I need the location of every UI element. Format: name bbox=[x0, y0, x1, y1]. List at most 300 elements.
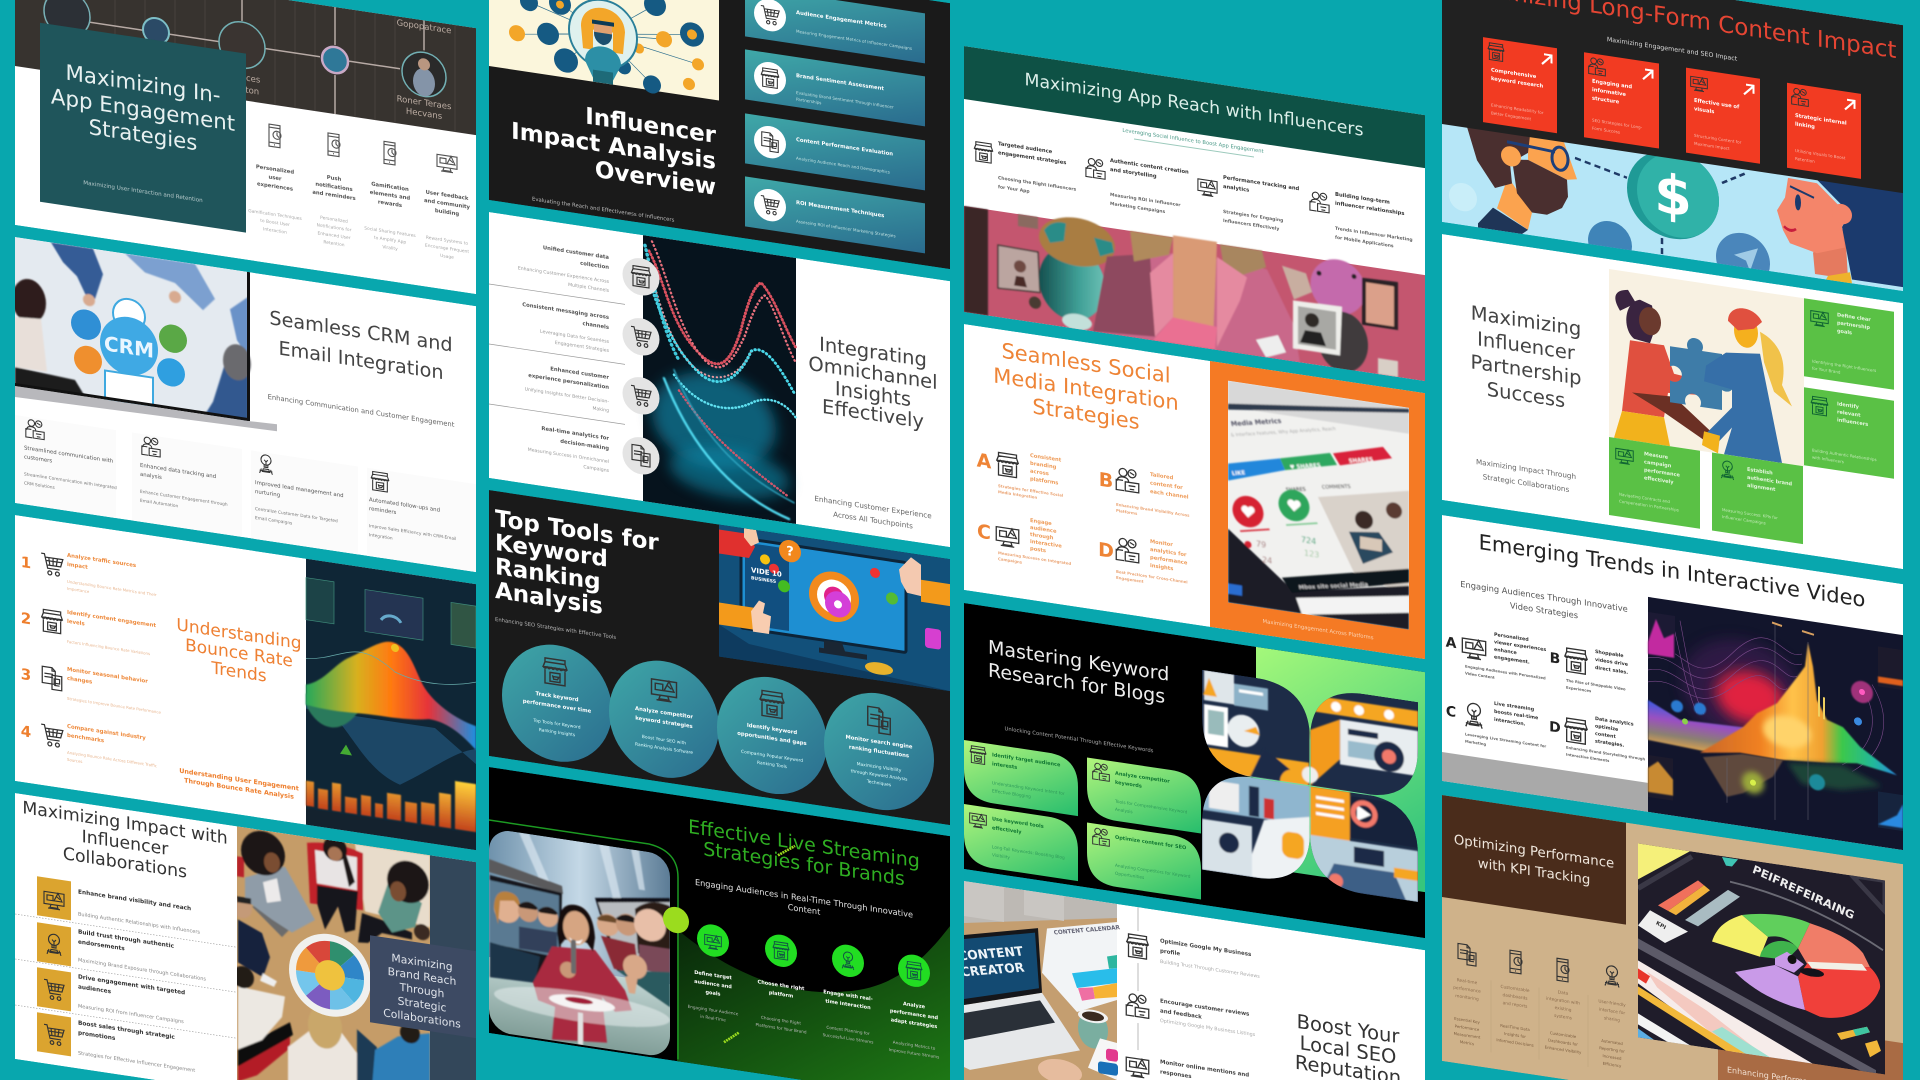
step 4: Analyzing Metrics to bbox=[893, 1039, 936, 1050]
feature: push notifications: and reminders bbox=[312, 190, 356, 202]
photo: dark network of people: Hecvans bbox=[406, 107, 443, 122]
leaf card 3: effectively bbox=[992, 825, 1022, 836]
leaf card 1: Effective Blogging bbox=[992, 788, 1031, 800]
column: real-time monitoring: Essential Key bbox=[1454, 1015, 1481, 1024]
subtitle: Engaging Audiences Through Innovative bbox=[1460, 579, 1628, 614]
item B bbox=[1550, 642, 1629, 699]
item: enhanced personalization bbox=[525, 360, 660, 421]
photo: social media metrics dashboard: & Interface Features, Why App Analytics, Reach bbox=[1230, 426, 1336, 439]
item A: Personalized bbox=[1494, 631, 1529, 643]
column: dashboards: and reports bbox=[1503, 1000, 1528, 1009]
item C: Live streaming bbox=[1494, 700, 1535, 712]
item A: Strategies for Effective Social bbox=[998, 483, 1064, 497]
item: enhanced personalization: Making bbox=[592, 405, 609, 413]
card: engaging structure: SEO Strategies for Long- bbox=[1592, 117, 1643, 130]
card: measure performance: performance bbox=[1644, 467, 1681, 479]
item: unified customer data: collection bbox=[580, 261, 609, 271]
card: measure performance: Compensation in Partnerships bbox=[1619, 498, 1679, 512]
item C: interactive bbox=[1030, 539, 1062, 550]
item: monitor mentions bbox=[1126, 1054, 1249, 1080]
feature: push notifications: Enhanced User bbox=[317, 230, 351, 241]
card: measure performance: campaign bbox=[1644, 459, 1672, 469]
item A bbox=[1446, 624, 1546, 688]
circle: identify keyword bbox=[717, 669, 827, 802]
column: user-friendly interface: Increased bbox=[1603, 1053, 1622, 1060]
title: Strategies bbox=[1032, 393, 1140, 434]
leaf card 4: Opportunities bbox=[1115, 870, 1145, 881]
card: establish alignment: alignment bbox=[1747, 483, 1776, 493]
item A: viewer experiences bbox=[1494, 639, 1546, 653]
title: Media Integration bbox=[993, 362, 1179, 415]
image: performance gauge dashboard: PEIFREFEIRAING bbox=[1751, 862, 1856, 922]
card: define clear goals: Identifying the Right Influencers bbox=[1812, 358, 1876, 373]
card: data tracking: Enhance Customer Engagement through bbox=[140, 488, 228, 507]
item D: analytics for bbox=[1150, 547, 1187, 558]
feature: personalized user experiences bbox=[248, 121, 302, 238]
leaf card 3: Visibility bbox=[992, 852, 1010, 860]
leaf card 4: Analyzing Competitors for Keyword bbox=[1115, 862, 1191, 880]
column: dashboards: dashboards bbox=[1503, 992, 1528, 1001]
card: engaging structure: structure bbox=[1592, 96, 1620, 106]
circle: track keyword: Ranking Insights bbox=[539, 727, 576, 738]
item: encourage reviews: Optimizing Google My Business Listings bbox=[1160, 1018, 1256, 1038]
card: establish alignment: Establish bbox=[1747, 467, 1773, 477]
column: real-time monitoring: Measurement bbox=[1454, 1030, 1481, 1039]
slide: Seamless CRM and Email Integration bbox=[12, 237, 476, 572]
card: content performance: Analyzing Audience Reach and Demographics bbox=[796, 156, 890, 175]
item A bbox=[977, 445, 1064, 503]
column: real-time monitoring: performance bbox=[1453, 984, 1481, 994]
title: Maximizing bbox=[1471, 301, 1581, 340]
item C: Measuring Success on Integrated bbox=[998, 550, 1071, 566]
list item 2: 2 bbox=[21, 609, 31, 628]
feature: user feedback: Usage bbox=[440, 252, 454, 260]
card: audience engagement: Measuring Engagement Metrics of Influencer Campaigns bbox=[796, 29, 912, 51]
title: Influencer bbox=[1477, 327, 1576, 365]
leaf card 2: Tools for Comprehensive Keyword bbox=[1114, 798, 1188, 815]
card: ROI measurement: ROI Measurement Techniques bbox=[796, 200, 884, 219]
header block and title: with KPI Tracking bbox=[1478, 856, 1590, 888]
list item 1: 1 bbox=[21, 553, 31, 572]
column: dashboards: Informed Decisions bbox=[1496, 1037, 1534, 1047]
card: internal linking: Retention bbox=[1795, 155, 1815, 163]
photo: dark network of people: Gopopatrace bbox=[397, 18, 451, 36]
card: brand sentiment: Evaluating Brand Sentiment Through Influencer bbox=[796, 90, 894, 109]
list item 1: Importance bbox=[67, 585, 90, 594]
feature: personalized user experiences: Personalized bbox=[256, 164, 294, 176]
item 4 bbox=[37, 1012, 195, 1075]
leaf card 1: interests bbox=[992, 761, 1017, 771]
column: dashboards bbox=[1496, 948, 1534, 1047]
feature: personalized user experiences: Interaction bbox=[263, 226, 287, 235]
slide: Optimizing Performance with KPI Tracking bbox=[1442, 795, 1908, 1080]
image: monitor with target bbox=[719, 524, 950, 691]
column: real-time monitoring: Performance bbox=[1455, 1023, 1480, 1032]
title: Success bbox=[1487, 377, 1565, 412]
column: data integration: Data bbox=[1558, 989, 1568, 996]
subtitle: Unlocking Content Potential Through Effective Keywords bbox=[1005, 726, 1154, 754]
caption: Maximizing Engagement Across Platforms bbox=[1263, 619, 1374, 641]
item 3: Drive engagement with targeted bbox=[78, 974, 185, 997]
clover collage of content icons bbox=[1202, 670, 1418, 902]
list item 3: Monitor seasonal behavior bbox=[67, 667, 148, 685]
photo: social media metrics dashboard: ♥ SHARES bbox=[1289, 462, 1321, 471]
item 4: Strategies for Effective Influencer Engagement bbox=[78, 1050, 195, 1074]
item: consistent messaging: Engagement Strategies bbox=[555, 339, 610, 354]
title: Research for Blogs bbox=[988, 658, 1165, 708]
image: performance gauge dashboard: KPI bbox=[1655, 921, 1667, 931]
column: user-friendly interface: interface for bbox=[1599, 1006, 1625, 1016]
feature: push notifications: Notifications for bbox=[317, 222, 352, 233]
item A: A bbox=[977, 448, 992, 474]
feature: gamification: Social Sharing Features bbox=[364, 225, 416, 239]
item C: Leveraging Live Streaming Content for bbox=[1465, 732, 1546, 749]
circle: monitor search: through Keyword Analysis bbox=[851, 768, 908, 782]
item: performance tracking: analytics bbox=[1223, 184, 1249, 194]
photo: dark network of people bbox=[15, 0, 476, 135]
column: data integration: Dashboards for bbox=[1548, 1037, 1578, 1046]
photo: influencer in pink jacket bbox=[964, 201, 1425, 384]
card: engaging structure bbox=[1584, 52, 1659, 149]
item A: branding bbox=[1030, 461, 1057, 471]
title panel bbox=[40, 23, 246, 233]
column: real-time monitoring: Metrics bbox=[1460, 1039, 1474, 1046]
image: performance gauge dashboard bbox=[1638, 843, 1885, 1080]
card: internal linking bbox=[1787, 83, 1861, 179]
feature: push notifications: Retention bbox=[323, 239, 345, 248]
subtitle: Enhancing SEO Strategies with Effective Tools bbox=[495, 617, 616, 641]
callout: brand reach: Strategic bbox=[398, 994, 446, 1014]
item C: Marketing bbox=[1465, 739, 1487, 747]
item: encourage reviews: Encourage customer reviews bbox=[1160, 998, 1250, 1018]
title: Collaborations bbox=[63, 844, 187, 883]
item: enhanced personalization: Unifying Insights for Better Decision- bbox=[525, 386, 609, 405]
column: data integration: existing bbox=[1555, 1004, 1572, 1013]
callout: brand reach: Maximizing bbox=[391, 951, 453, 973]
item: optimize google bbox=[1127, 933, 1260, 980]
card: data tracking: Email Automation bbox=[140, 497, 179, 509]
item: consistent messaging: Consistent messaging across bbox=[522, 302, 609, 321]
column: real-time monitoring bbox=[1453, 943, 1481, 1047]
card: ROI measurement bbox=[745, 176, 925, 253]
leaf card 1 bbox=[964, 740, 1078, 816]
title: Partnership bbox=[1470, 350, 1582, 389]
side strip bbox=[430, 855, 476, 1080]
card: engaging structure: Form Success bbox=[1592, 125, 1620, 134]
card: automated follow-ups: reminders bbox=[369, 506, 397, 516]
step 2: platform bbox=[769, 990, 793, 1000]
title: Email Integration bbox=[278, 336, 444, 384]
title: Top Tools for bbox=[495, 506, 659, 556]
title: Overview bbox=[595, 157, 716, 201]
title: Keyword bbox=[495, 530, 608, 573]
title: Effective Live Streaming bbox=[688, 814, 920, 872]
step 1: Engaging Your Audience bbox=[688, 1003, 739, 1016]
item B: B bbox=[1099, 468, 1113, 493]
card: measure performance: Measure bbox=[1644, 451, 1669, 461]
photo: glowing data waves bbox=[643, 235, 796, 524]
feature: push notifications: Personalized bbox=[320, 214, 348, 224]
photo: content creator desk: CONTENT CALENDAR bbox=[1053, 925, 1121, 937]
leaf card 2: keywords bbox=[1115, 780, 1142, 790]
title: Influencer bbox=[585, 104, 717, 149]
circle: monitor search bbox=[824, 685, 934, 818]
item: authentic content: Marketing Campaigns bbox=[1110, 200, 1165, 215]
subtitle: Maximizing Impact Through bbox=[1476, 457, 1576, 481]
circle: identify keyword: Identify keyword bbox=[747, 723, 797, 736]
card: measure performance: effectively bbox=[1644, 475, 1674, 486]
feature: personalized user experiences: experiences bbox=[257, 181, 293, 193]
title: Boost Your bbox=[1297, 1009, 1400, 1048]
item B: videos drive bbox=[1595, 656, 1629, 667]
list item 4: Sources bbox=[67, 756, 82, 764]
leaf card 2: Analyze competitor bbox=[1115, 771, 1170, 785]
callout: brand reach: Through bbox=[399, 980, 444, 1000]
column: user-friendly interface: Efficiency bbox=[1603, 1060, 1622, 1068]
column: user-friendly interface bbox=[1598, 964, 1626, 1069]
card: streamlined communication: Streamline Communication with Integrated bbox=[24, 471, 117, 491]
feature: gamification: Gamification bbox=[371, 181, 409, 193]
item 3 bbox=[37, 967, 185, 1029]
item D: strategies. bbox=[1595, 738, 1624, 748]
column: data integration: Enhanced Visibility bbox=[1545, 1044, 1582, 1054]
circle: analyze competitor: Ranking Analysis Software bbox=[635, 741, 693, 756]
illustration: two people and a coin: $ bbox=[1654, 162, 1692, 230]
slide: Effective Live Streaming Strategies for Brands bbox=[489, 767, 950, 1080]
slide: Maximizing In-App Engagement Strategies bbox=[15, 0, 476, 294]
card: streamlined communication: customers bbox=[24, 454, 52, 465]
item A: Consistent bbox=[1030, 453, 1062, 464]
title: Seamless CRM and bbox=[269, 306, 453, 356]
item C bbox=[1446, 693, 1546, 756]
header block and title: Optimizing Performance bbox=[1454, 832, 1614, 871]
feature: user feedback bbox=[424, 152, 471, 263]
title: Trends bbox=[210, 658, 267, 687]
column: user-friendly interface: User-friendly bbox=[1598, 998, 1626, 1008]
illustration: influencer network bbox=[489, 0, 719, 104]
step 2: Platforms for Your Brand bbox=[755, 1021, 807, 1034]
feature: gamification bbox=[364, 138, 416, 255]
photo: social media metrics dashboard: 79 bbox=[1256, 539, 1266, 550]
list item 1 bbox=[22, 552, 156, 596]
item: optimize google: Building Trust Through Customer Reviews bbox=[1160, 959, 1260, 980]
item C: posts bbox=[1030, 546, 1046, 554]
item: long-term relationships: Trends in Influencer Marketing bbox=[1335, 225, 1413, 243]
item: performance tracking: Influencers Effectively bbox=[1223, 217, 1279, 232]
leaf card 1: Identify target audience bbox=[992, 752, 1061, 769]
item: unified customer data: Enhancing Customer Experience Across bbox=[518, 265, 610, 285]
item: real-time analytics: decision-making bbox=[560, 439, 609, 452]
slide: Maximizing App Reach with Influencers bbox=[964, 46, 1425, 384]
slide: Understanding Bounce Rate Trends bbox=[15, 515, 476, 850]
item A: engagement. bbox=[1494, 654, 1530, 665]
photo: circle of people around a wheel bbox=[232, 822, 430, 1080]
item: authentic content: Measuring ROI in Influencer bbox=[1110, 191, 1181, 208]
card: brand sentiment bbox=[745, 49, 925, 126]
slide: Maximizing Influencer Partnership Success bbox=[1442, 234, 1903, 569]
card: data tracking: analysis bbox=[140, 472, 162, 481]
photo: content creator desk: CREATOR bbox=[959, 959, 1026, 979]
circle: identify keyword: Comparing Popular Keyword bbox=[741, 748, 803, 764]
list item 2: levels bbox=[67, 619, 85, 627]
card: brand sentiment: Brand Sentiment Assessment bbox=[796, 73, 884, 92]
card: keyword research: Enhancing Readability for bbox=[1491, 102, 1544, 115]
item: consistent messaging: channels bbox=[582, 321, 609, 331]
callout: brand reach bbox=[370, 935, 476, 1038]
feature: gamification: to Amplify App bbox=[374, 234, 406, 245]
circle: analyze competitor bbox=[609, 653, 719, 786]
list item 1: Analyze traffic sources bbox=[67, 553, 136, 569]
column: dashboards: Real-Time Data bbox=[1500, 1022, 1530, 1032]
feature: gamification: Virality bbox=[382, 244, 398, 252]
item: long-term relationships: Building long-term bbox=[1335, 192, 1390, 206]
photo: dark network of people: Frances bbox=[228, 71, 261, 86]
item: long-term relationships: influencer relationships bbox=[1335, 201, 1404, 217]
circle: analyze competitor: Boost Your SEO with bbox=[642, 733, 686, 746]
item: optimize google: Optimize Google My Business bbox=[1160, 938, 1252, 958]
item C: C bbox=[1446, 704, 1456, 721]
column: data integration: Customizable bbox=[1550, 1030, 1577, 1039]
leaf card 2 bbox=[1087, 757, 1201, 834]
title: Effectively bbox=[822, 395, 924, 433]
item 3: audiences bbox=[78, 984, 112, 995]
circle: identify keyword: Ranking Tools bbox=[757, 759, 788, 770]
item D: D bbox=[1098, 538, 1114, 563]
item D: insights bbox=[1150, 563, 1173, 572]
item B: Experiences bbox=[1566, 686, 1592, 693]
card: keyword research: keyword research bbox=[1491, 76, 1543, 90]
list item 3: 3 bbox=[21, 665, 31, 684]
feature: user feedback: User feedback bbox=[426, 190, 469, 202]
list item 4: Analyzing Bounce Rate Across Different Traffic bbox=[67, 749, 157, 768]
item: performance tracking: Performance tracking and bbox=[1223, 175, 1300, 192]
item D bbox=[1098, 531, 1188, 590]
item B: B bbox=[1550, 650, 1560, 668]
subtitle: Understanding User Engagement bbox=[179, 767, 299, 793]
item 2: Maximizing Brand Exposure through Collaborations bbox=[78, 957, 206, 983]
orange panel bbox=[1210, 361, 1425, 659]
list item 3 bbox=[22, 666, 161, 714]
title panel: App Engagement bbox=[51, 84, 235, 136]
item D: Monitor bbox=[1150, 539, 1173, 548]
card: brand sentiment: Partnerships bbox=[796, 96, 821, 105]
slide: Maximizing Impact with Influencer Collaborations bbox=[15, 789, 476, 1080]
card: internal linking: linking bbox=[1795, 121, 1815, 130]
title: Omnichannel bbox=[808, 351, 938, 394]
card: engaging structure: informative bbox=[1592, 87, 1626, 98]
circle: monitor search: ranking fluctuations bbox=[849, 745, 909, 759]
slide: Top Tools for Keyword Ranking Analysis bbox=[489, 490, 950, 825]
photo: CRM laptop on table: CRM bbox=[104, 331, 154, 363]
circle: analyze competitor: Analyze competitor bbox=[635, 706, 693, 721]
feature: personalized user experiences: to Boost User bbox=[260, 217, 290, 228]
item C: Campaigns bbox=[998, 556, 1023, 564]
item D: Data analytics bbox=[1595, 715, 1634, 727]
subtitle: Across All Touchpoints bbox=[833, 509, 913, 530]
item D: Interactive Elements bbox=[1566, 753, 1610, 763]
step 3: Engage with real- bbox=[823, 989, 873, 1003]
photo: social media metrics dashboard: COMMENTS bbox=[1321, 484, 1351, 491]
card: lead management: Email Campaigns bbox=[255, 515, 293, 526]
item: real-time analytics: Measuring Success in Omnichannel bbox=[528, 446, 609, 464]
item: authentic content: Authentic content creation bbox=[1110, 158, 1189, 176]
step 1: Define target bbox=[694, 970, 732, 981]
photo: content creator desk: CONTENT bbox=[957, 943, 1025, 963]
item D: content bbox=[1595, 730, 1616, 740]
step 2: Choosing the Right bbox=[761, 1014, 801, 1025]
item: long-term relationships bbox=[1310, 188, 1413, 252]
card: streamlined communication: CRM Solutions bbox=[24, 480, 55, 491]
card: lead management: Centralize Customer Data for Targeted bbox=[255, 506, 338, 524]
item 1 bbox=[37, 876, 200, 940]
title: Ranking bbox=[495, 554, 601, 596]
card: measure performance bbox=[1609, 437, 1700, 529]
item 4: Boost sales through strategic bbox=[78, 1020, 175, 1041]
item: consistent messaging: Leveraging Data for Seamless bbox=[540, 328, 610, 345]
circle: analyze competitor: keyword strategies bbox=[635, 715, 693, 730]
card: lead management: nurturing bbox=[255, 489, 280, 499]
item 1: Building Authentic Relationships with Influencers bbox=[78, 911, 200, 936]
step 2 bbox=[755, 931, 807, 1034]
leaf card 4: Optimize content for SEO bbox=[1115, 835, 1187, 851]
step 3: Content Planning for bbox=[826, 1024, 870, 1036]
title: Emerging Trends in Interactive Video bbox=[1479, 529, 1865, 612]
card: identify influencers: Identify bbox=[1837, 401, 1860, 411]
card: define clear goals: goals bbox=[1837, 328, 1852, 336]
illustration: two people and a coin bbox=[1449, 117, 1903, 311]
title: Seamless Social bbox=[1001, 337, 1171, 387]
circle: track keyword: performance over time bbox=[523, 699, 592, 715]
header block and title bbox=[1442, 795, 1626, 925]
step 3 bbox=[823, 941, 873, 1044]
card: identify influencers: influencers bbox=[1837, 417, 1868, 428]
card: effective visuals: Structuring Content for bbox=[1694, 132, 1742, 144]
callout: brand reach: Collaborations bbox=[383, 1006, 461, 1030]
list item 3: changes bbox=[67, 676, 92, 686]
subtitle: Content bbox=[788, 902, 821, 917]
header band and title bbox=[964, 46, 1425, 168]
item: unified customer data: Multiple Channels bbox=[568, 281, 610, 294]
photo: social media metrics dashboard bbox=[1228, 381, 1409, 631]
item C: interaction. bbox=[1494, 716, 1526, 727]
slide: Mastering Keyword Research for Blogs bbox=[964, 603, 1425, 938]
title: Understanding bbox=[176, 615, 302, 654]
column: data integration bbox=[1545, 956, 1582, 1054]
feature: user feedback: building bbox=[435, 208, 459, 218]
item: authentic content bbox=[1086, 154, 1189, 218]
item C: boosts real-time bbox=[1494, 708, 1539, 721]
card: automated follow-ups: Automated follow-ups and bbox=[369, 497, 440, 514]
chart image bbox=[306, 559, 476, 850]
photo: content creator desk bbox=[957, 880, 1121, 1080]
item: targeted audience: Choosing the Right Influencers bbox=[998, 175, 1076, 192]
circle: monitor search: Maximizing Visibility bbox=[857, 761, 902, 773]
photo: social media metrics dashboard: SHARES bbox=[1285, 487, 1306, 493]
subtitle: Strategic Collaborations bbox=[1483, 472, 1569, 494]
card: identify influencers: with Influencers bbox=[1812, 454, 1844, 464]
image: monitor with target: ? bbox=[786, 544, 794, 560]
feature: push notifications: Push bbox=[327, 175, 341, 183]
image: rainbow data landscape bbox=[1648, 597, 1903, 850]
step 2: Choose the right bbox=[758, 979, 805, 992]
item D: optimize bbox=[1595, 723, 1619, 733]
card: keyword research: Better Engagement bbox=[1491, 110, 1531, 121]
item A: Video Content bbox=[1465, 671, 1495, 680]
photo: social media metrics dashboard: 123 bbox=[1304, 549, 1319, 560]
item C: audience bbox=[1030, 525, 1057, 535]
subtitle: Evaluating the Reach and Effectiveness of Influencers bbox=[532, 196, 675, 224]
feature: user feedback: and community bbox=[424, 198, 471, 211]
